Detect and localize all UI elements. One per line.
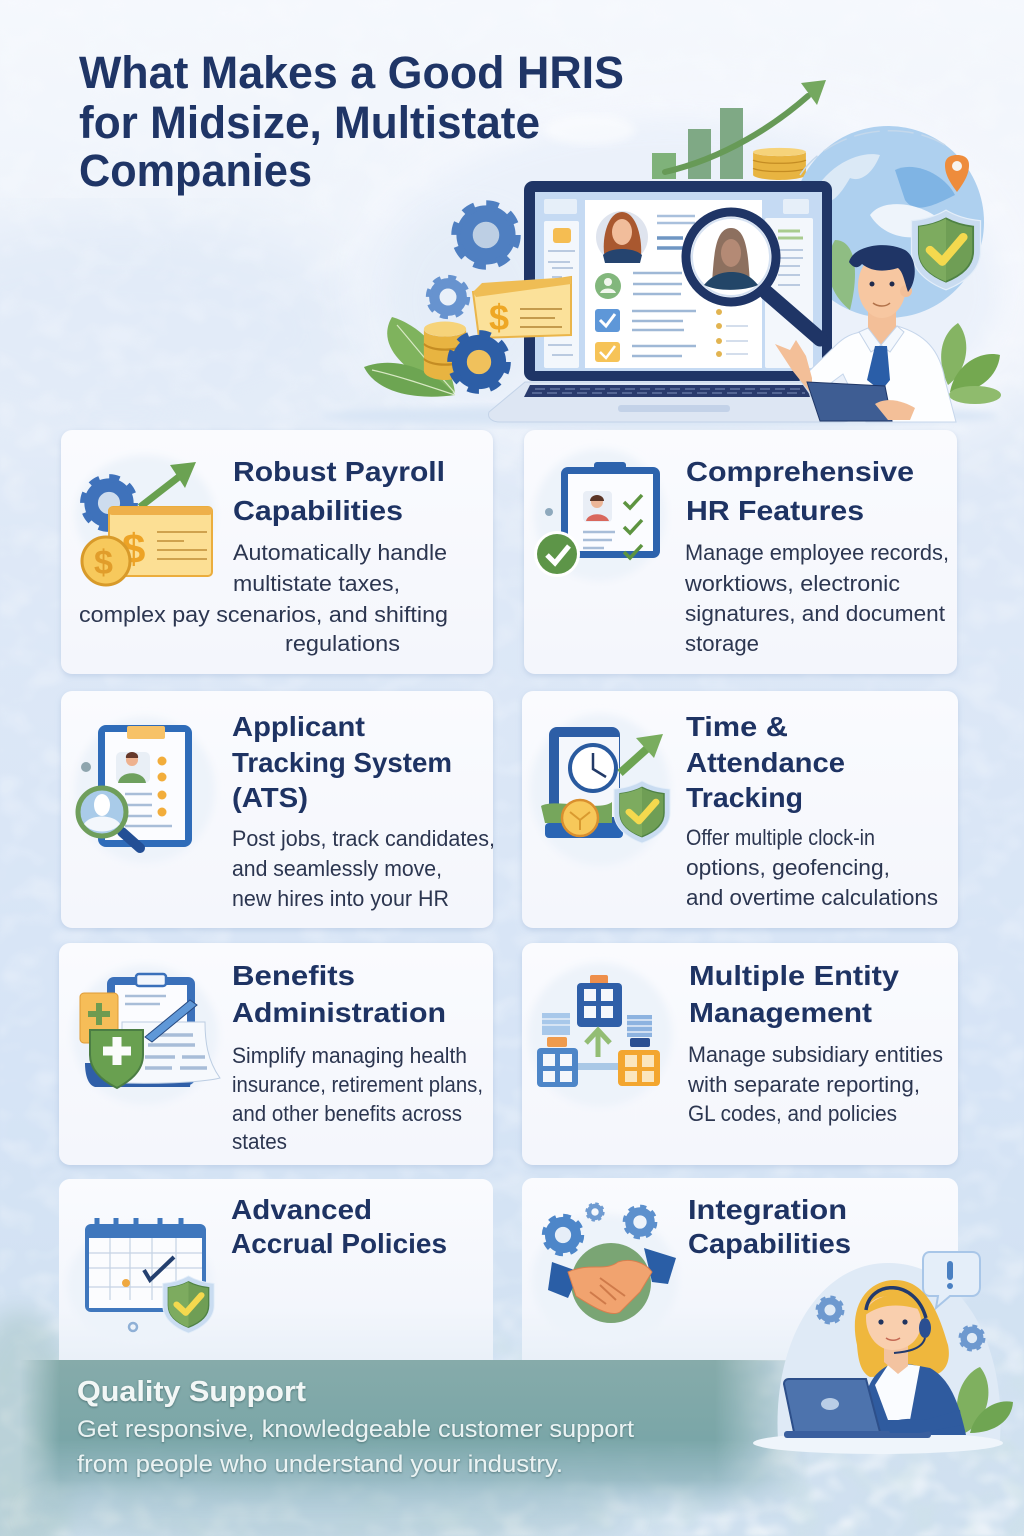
support agent illustration — [753, 1252, 1013, 1454]
heading: Applicant — [232, 711, 365, 742]
body text: insurance, retirement plans, — [232, 1072, 483, 1097]
banner heading: Quality Support — [77, 1376, 306, 1408]
banner: Quality Support — [20, 1360, 810, 1520]
payroll envelope — [473, 277, 571, 338]
icon: clock, coin and shield — [530, 714, 670, 866]
speech bubble — [923, 1252, 980, 1308]
banner text — [77, 1416, 634, 1478]
body text: states — [232, 1129, 287, 1154]
heading: Attendance — [686, 747, 845, 778]
heading: Comprehensive — [686, 456, 914, 487]
body text: and seamlessly move, — [232, 856, 442, 881]
heading — [686, 711, 845, 813]
body text: with separate reporting, — [687, 1072, 920, 1097]
panel: Integration Capabilities — [522, 1178, 958, 1361]
banner text: Get responsive, knowledgeable customer support — [77, 1416, 634, 1443]
heading — [233, 456, 445, 526]
icon: clipboard with checks — [534, 449, 666, 581]
dome backdrop — [753, 1263, 1003, 1454]
heading: Robust Payroll — [233, 456, 445, 487]
body text — [687, 1042, 943, 1126]
panel: Advanced Accrual Policies — [59, 1179, 493, 1361]
body text: GL codes, and policies — [688, 1101, 897, 1126]
payroll envelope: $ — [489, 297, 509, 338]
body text: Manage employee records, — [685, 540, 949, 565]
title: What Makes a Good HRIS — [79, 47, 624, 98]
body text: Simplify managing health — [232, 1043, 467, 1068]
laptop base — [489, 382, 858, 422]
panel: Benefits Administration — [59, 943, 493, 1165]
icon: payroll gear, arrow and coin — [75, 455, 215, 585]
panel: Comprehensive HR Features — [524, 430, 957, 674]
body text: Automatically handle — [233, 540, 447, 565]
plant — [957, 1367, 1013, 1433]
coin stack — [753, 148, 806, 180]
heading: Management — [689, 997, 872, 1028]
security shield — [911, 210, 981, 290]
heading: Integration — [688, 1194, 847, 1225]
heading: Advanced — [231, 1194, 372, 1225]
heading: Capabilities — [688, 1228, 851, 1259]
panel: Time and Attendance Tracking — [522, 691, 958, 928]
title: for Midsize, Multistate — [79, 97, 540, 148]
icon: handshake with gears — [532, 1204, 678, 1346]
panel: Applicant Tracking System — [61, 691, 495, 928]
body text: storage — [685, 631, 759, 656]
body text: multistate taxes, — [233, 571, 400, 596]
hero illustration — [364, 80, 1001, 422]
laptop screen with employee profile — [524, 181, 832, 381]
heading — [686, 456, 914, 526]
body text — [684, 540, 949, 656]
body text: worktiows, electronic — [684, 571, 900, 596]
heading: Tracking — [686, 782, 803, 813]
location pin — [945, 155, 969, 192]
man with tablet — [775, 245, 956, 422]
banner text: from people who understand your industry. — [77, 1451, 563, 1478]
heading — [232, 711, 452, 813]
right plants — [941, 323, 1001, 404]
left plants — [364, 317, 455, 397]
panel: Multiple Entity Management — [522, 943, 958, 1165]
magnifying glass — [686, 212, 820, 339]
body text: Manage subsidiary entities — [688, 1042, 943, 1067]
icon: payroll gear, arrow and coin: $ — [122, 525, 145, 572]
bar chart with growth arrow — [652, 80, 826, 179]
body text: new hires into your HR — [232, 886, 449, 911]
small gears — [818, 1298, 984, 1350]
title — [79, 47, 624, 196]
body text: options, geofencing, — [686, 855, 890, 880]
heading: Capabilities — [233, 495, 403, 526]
body text: complex pay scenarios, and shifting — [79, 602, 448, 627]
sidebar — [544, 199, 579, 368]
globe — [792, 126, 984, 318]
heading: (ATS) — [232, 782, 308, 813]
icon: resume clipboard with magnifier — [75, 717, 215, 863]
woman with headset — [855, 1280, 966, 1435]
body text — [686, 825, 938, 910]
body text — [232, 1043, 483, 1154]
body text: regulations — [285, 631, 400, 656]
right panel — [765, 199, 813, 368]
gears — [429, 205, 516, 316]
icon: entity org chart — [528, 963, 672, 1107]
icon: calendar with shield — [67, 1218, 214, 1345]
heading — [232, 960, 446, 1028]
payroll coins — [424, 322, 466, 380]
dark gear — [452, 334, 506, 390]
heading: Administration — [232, 997, 446, 1028]
heading — [688, 1194, 851, 1259]
heading: Multiple Entity — [689, 960, 899, 991]
heading: HR Features — [686, 495, 864, 526]
heading: Time & — [686, 711, 788, 742]
title: Companies — [79, 145, 312, 196]
panel: Robust Payroll Capabilities — [61, 430, 493, 674]
heading: Accrual Policies — [231, 1228, 447, 1259]
body text: Offer multiple clock-in — [686, 825, 875, 850]
heading: Benefits — [232, 960, 355, 991]
icon: benefits clipboard, shield and pen — [72, 965, 220, 1105]
body text: Post jobs, track candidates, — [232, 826, 495, 851]
icon: payroll gear, arrow and coin: $ — [94, 544, 113, 582]
heading — [231, 1194, 447, 1259]
heading — [689, 960, 899, 1028]
body text: signatures, and document — [685, 601, 945, 626]
hero backdrop — [320, 115, 1000, 460]
body text — [232, 826, 495, 911]
body text — [79, 540, 448, 656]
laptop — [784, 1379, 962, 1438]
heading: Tracking System — [232, 747, 452, 778]
body text: and overtime calculations — [686, 885, 938, 910]
main record panel — [585, 200, 762, 368]
body text: and other benefits across — [232, 1101, 462, 1126]
